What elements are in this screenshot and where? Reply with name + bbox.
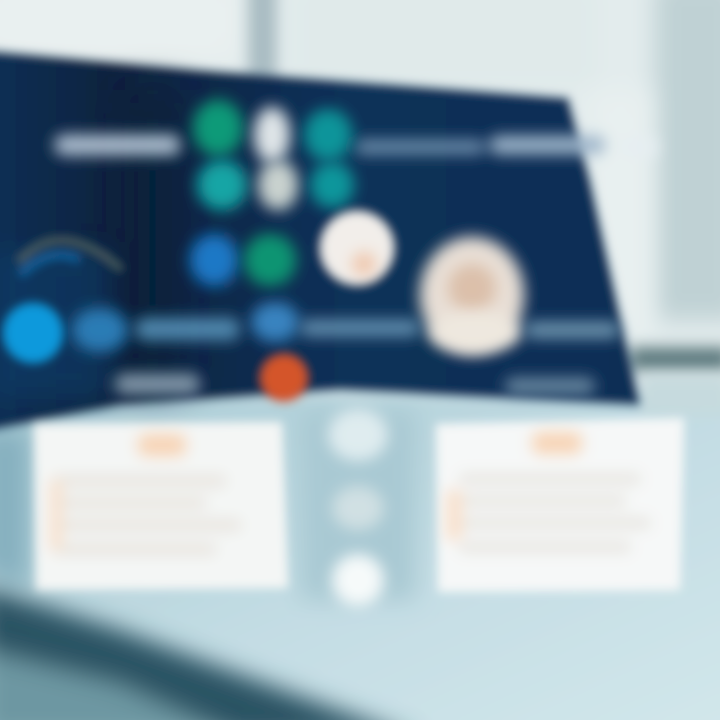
desk surface [0,347,720,720]
portrait figure [420,237,524,353]
blue status row [3,302,620,363]
panel: right card [436,418,684,592]
left card badge [138,434,186,456]
dark screen panel [0,50,640,432]
left card text lines [50,476,240,554]
center column circles [328,409,388,606]
panel: left card [34,422,288,590]
center column backdrop [300,410,416,600]
icon grid: lower tiles [190,234,296,286]
lower screen labels and orange icon [115,354,595,402]
right card badge [532,432,582,454]
left arc chart [18,240,122,275]
icon grid: upper tiles [193,100,354,210]
heading text, blurred [55,135,658,156]
white circle icon [320,211,394,285]
right card text lines [446,474,650,552]
laptop base shadow [0,430,420,720]
